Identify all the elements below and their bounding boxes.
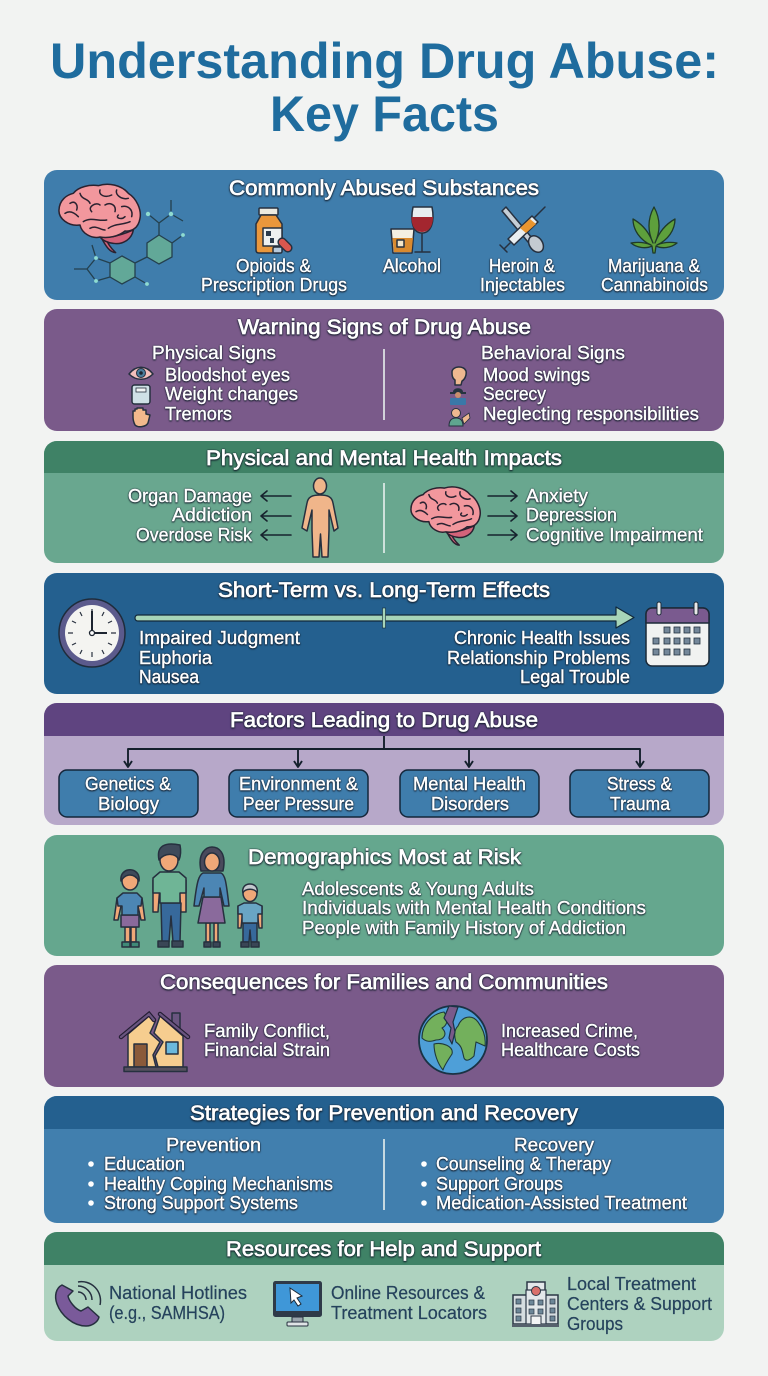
behavioral signs list: Secrecy xyxy=(483,384,546,404)
icon: human body xyxy=(302,478,338,557)
physical impacts list: Addiction xyxy=(172,505,252,525)
behavioral signs list: Neglecting responsibilities xyxy=(483,404,699,424)
figure: man xyxy=(153,844,186,947)
box: genetics: Biology xyxy=(98,794,159,814)
icon: scale xyxy=(132,385,150,404)
icon: brain xyxy=(411,487,480,545)
physical impacts list: Organ Damage xyxy=(128,486,252,506)
physical signs list: Tremors xyxy=(165,404,232,424)
box: genetics: Genetics & xyxy=(85,774,171,794)
label: local treatment centers: Local Treatment xyxy=(567,1274,696,1294)
box: mental health: Disorders xyxy=(431,794,509,814)
label: alcohol: Alcohol xyxy=(383,256,441,276)
panel: health impacts xyxy=(44,441,724,563)
panel: warning signs xyxy=(44,309,724,431)
long-term list xyxy=(447,628,630,687)
label: online resources: Online Resources & xyxy=(331,1283,485,1303)
label: marijuana: Cannabinoids xyxy=(601,275,708,295)
icon: hand xyxy=(133,408,150,427)
icon: syringe and spoon xyxy=(500,207,546,255)
label: local treatment centers xyxy=(567,1274,712,1334)
label: opioids: Prescription Drugs xyxy=(201,275,347,295)
mental impacts list: Cognitive Impairment xyxy=(526,525,703,545)
panel: resources xyxy=(44,1232,724,1341)
heading: health impacts: Physical and Mental Health Impacts xyxy=(206,447,562,470)
label: community consequences: Increased Crime, xyxy=(501,1021,638,1041)
panel: commonly abused substances xyxy=(44,170,724,300)
figure: woman xyxy=(194,847,229,947)
label: family consequences: Family Conflict, xyxy=(204,1021,330,1041)
icon: cracked globe xyxy=(419,1006,487,1074)
icon: hospital xyxy=(512,1282,559,1327)
heading: factors: Factors Leading to Drug Abuse xyxy=(230,709,538,732)
prevention list: Strong Support Systems xyxy=(104,1193,298,1213)
physical signs list: Physical Signs xyxy=(152,343,276,363)
label: online resources xyxy=(331,1283,487,1323)
mental impacts list: Depression xyxy=(526,505,617,525)
label: hotlines: (e.g., SAMHSA) xyxy=(109,1303,225,1323)
panel: demographics xyxy=(44,835,724,956)
label: heroin xyxy=(480,256,565,295)
physical signs list: Weight changes xyxy=(165,384,298,404)
physical signs list xyxy=(152,343,298,424)
icon: monitor xyxy=(273,1281,322,1326)
icon: family xyxy=(114,844,262,947)
box: stress: Trauma xyxy=(610,794,671,814)
box: mental health xyxy=(400,770,539,817)
label: opioids xyxy=(201,256,347,295)
label: heroin: Injectables xyxy=(480,275,565,295)
box: environment: Environment & xyxy=(239,774,358,794)
icon: calendar xyxy=(646,602,709,666)
icon: eye xyxy=(129,367,153,379)
recovery list: Recovery xyxy=(514,1135,594,1155)
box: genetics xyxy=(59,770,198,817)
label: heroin: Heroin & xyxy=(489,256,555,276)
box: stress xyxy=(570,770,709,817)
risk groups list: Individuals with Mental Health Conditions xyxy=(302,898,646,918)
figure: boy xyxy=(114,870,145,947)
icon: alcohol glasses xyxy=(391,207,433,253)
prevention list: Prevention xyxy=(166,1135,261,1155)
recovery list xyxy=(421,1135,687,1213)
box: environment xyxy=(229,770,368,817)
long-term list: Relationship Problems xyxy=(447,648,630,668)
behavioral signs list: Mood swings xyxy=(483,365,590,385)
risk groups list: Adolescents & Young Adults xyxy=(302,879,534,899)
icon: cracked house xyxy=(121,1013,188,1072)
box: stress: Stress & xyxy=(607,774,672,794)
arrows: right xyxy=(488,491,517,540)
physical impacts list xyxy=(128,486,253,545)
box: environment: Peer Pressure xyxy=(243,794,354,814)
recovery list: Support Groups xyxy=(436,1174,563,1194)
label: local treatment centers: Groups xyxy=(567,1314,623,1334)
label: online resources: Treatment Locators xyxy=(331,1303,487,1323)
behavioral signs list xyxy=(481,343,699,424)
icon: molecule xyxy=(74,200,185,286)
risk groups list xyxy=(302,879,646,938)
behavioral signs list: Behavioral Signs xyxy=(481,343,625,363)
prevention list xyxy=(88,1135,333,1213)
short-term list: Impaired Judgment xyxy=(139,628,300,648)
title: Understanding Drug Abuse: xyxy=(50,33,719,89)
mental impacts list xyxy=(526,486,703,545)
short-term list: Euphoria xyxy=(139,648,213,668)
label: community consequences xyxy=(501,1021,640,1060)
label: hotlines xyxy=(109,1283,247,1323)
title xyxy=(50,33,719,142)
physical impacts list: Overdose Risk xyxy=(136,525,253,545)
heading: consequences: Consequences for Families and Communities xyxy=(160,971,608,994)
icon: brain xyxy=(59,184,140,253)
prevention list: Healthy Coping Mechanisms xyxy=(104,1174,333,1194)
title: Key Facts xyxy=(270,86,499,142)
label: family consequences xyxy=(204,1021,330,1060)
label: local treatment centers: Centers & Support xyxy=(567,1294,712,1314)
icon: head xyxy=(452,367,466,385)
risk groups list: People with Family History of Addiction xyxy=(302,918,626,938)
short-term list: Nausea xyxy=(139,667,200,687)
icon: clock xyxy=(59,599,125,667)
figure: small boy xyxy=(238,884,262,947)
icon: secrecy figure xyxy=(450,388,466,405)
physical signs list: Bloodshot eyes xyxy=(165,365,290,385)
panel: factors xyxy=(44,703,724,825)
prevention list: Education xyxy=(104,1154,185,1174)
label: hotlines: National Hotlines xyxy=(109,1283,247,1303)
icon: cannabis leaf xyxy=(631,207,677,253)
icon: neglect figure xyxy=(449,408,470,426)
recovery list: Medication-Assisted Treatment xyxy=(436,1193,687,1213)
connector tree xyxy=(124,736,644,767)
label: community consequences: Healthcare Costs xyxy=(501,1040,640,1060)
arrows: left xyxy=(261,491,291,540)
mental impacts list: Anxiety xyxy=(526,486,588,506)
icon: pill bottle xyxy=(256,208,293,253)
long-term list: Legal Trouble xyxy=(520,667,630,687)
box: mental health: Mental Health xyxy=(413,774,526,794)
short-term list xyxy=(139,628,300,687)
panel: strategies xyxy=(44,1096,724,1223)
timeline arrow xyxy=(135,607,634,628)
heading: commonly abused substances: Commonly Abused Substances xyxy=(229,177,539,200)
icon: phone xyxy=(56,1282,100,1326)
panel: short vs long term xyxy=(44,573,724,694)
panel: consequences xyxy=(44,965,724,1087)
heading: short vs long term: Short-Term vs. Long-Term Effects xyxy=(218,579,550,602)
recovery list: Counseling & Therapy xyxy=(436,1154,611,1174)
heading: demographics: Demographics Most at Risk xyxy=(248,846,522,869)
long-term list: Chronic Health Issues xyxy=(454,628,630,648)
label: opioids: Opioids & xyxy=(236,256,311,276)
label: marijuana: Marijuana & xyxy=(608,256,700,276)
heading: strategies: Strategies for Prevention and Recovery xyxy=(190,1102,579,1125)
heading: resources: Resources for Help and Support xyxy=(226,1238,541,1261)
label: marijuana xyxy=(601,256,708,295)
label: family consequences: Financial Strain xyxy=(204,1040,330,1060)
heading: warning signs: Warning Signs of Drug Abuse xyxy=(238,316,531,339)
